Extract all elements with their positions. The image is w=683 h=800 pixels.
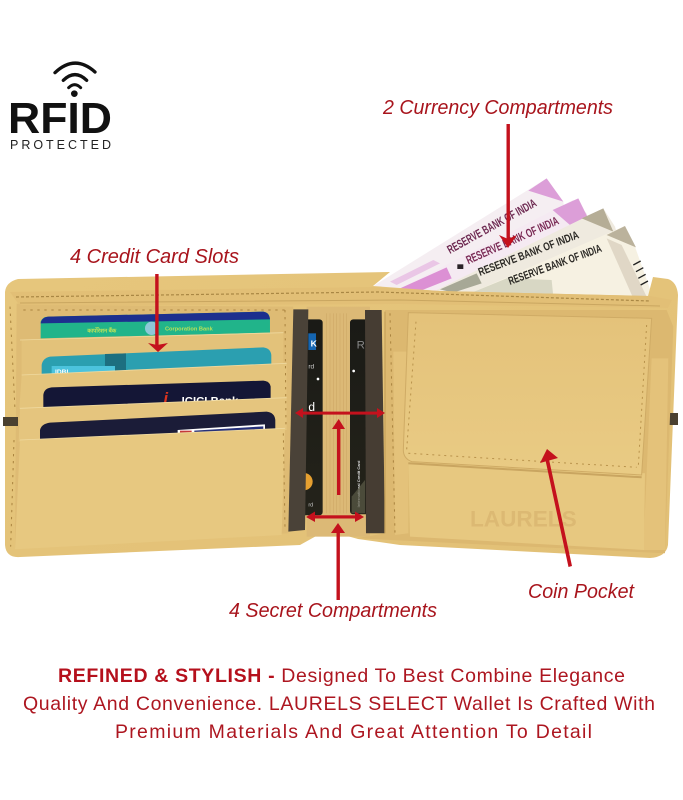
centre spine bbox=[307, 307, 370, 537]
right panel bbox=[357, 310, 673, 553]
side gusset bbox=[393, 352, 408, 535]
stitching bbox=[10, 307, 287, 547]
secret card left: d bbox=[308, 400, 315, 414]
secret card right bbox=[350, 319, 373, 514]
secret card right: International Credit Card bbox=[356, 460, 361, 507]
card 2: teal bank card bbox=[42, 347, 271, 376]
card slot backing bbox=[15, 303, 293, 548]
centre panel bbox=[288, 307, 385, 537]
arrow: currency compartments bbox=[499, 124, 517, 248]
card slot pocket 3 bbox=[19, 398, 287, 442]
arrow: secret compartments upper horizontal bbox=[295, 408, 385, 418]
arrow: secret compartments vertical up bbox=[332, 419, 345, 495]
top binding bbox=[10, 287, 672, 308]
arrow: secret compartments vertical lower bbox=[331, 523, 345, 600]
card 4: dark bank card bbox=[40, 412, 275, 441]
label: Coin Pocket: Coin Pocket bbox=[528, 581, 635, 603]
description text: REFINED & STYLISH - Designed To Best Combine Elegance bbox=[58, 665, 625, 687]
front pocket bbox=[15, 428, 285, 549]
wallet bbox=[3, 272, 678, 558]
right coin pocket bbox=[357, 310, 673, 553]
flap shadow bbox=[408, 463, 642, 477]
description text: Quality And Convenience. LAURELS SELECT Wallet Is Crafted With bbox=[23, 693, 655, 715]
card 2: teal bank card: IDBI bbox=[55, 369, 68, 376]
secret card left: rd bbox=[308, 363, 315, 370]
label: 4 Credit Card Slots: 4 Credit Card Slots bbox=[70, 246, 239, 268]
card 3: ICICI card bbox=[43, 381, 271, 408]
secret card right: R bbox=[357, 339, 365, 351]
right edge shading bbox=[383, 312, 387, 533]
RFID wordmark: RFID bbox=[8, 94, 112, 143]
note: front grey: RESERVE BANK OF INDIA bbox=[507, 243, 603, 288]
arrow: credit card slots bbox=[148, 274, 168, 352]
secret card left: rd bbox=[308, 503, 313, 509]
right dark strip bbox=[365, 310, 385, 533]
currency notes bbox=[373, 178, 653, 303]
note: back grey: RESERVE BANK OF INDIA bbox=[477, 229, 581, 279]
card 3: ICICI card: ICICI Bank bbox=[182, 396, 239, 408]
embossed brand: LAURELS bbox=[470, 507, 577, 532]
note: front pink: RESERVE BANK OF INDIA bbox=[464, 214, 561, 267]
description text bbox=[23, 665, 655, 743]
label: 2 Currency Compartments: 2 Currency Compartments bbox=[382, 97, 613, 119]
arrow: secret compartments lower horizontal bbox=[306, 512, 364, 522]
note: back pink bbox=[373, 178, 580, 303]
coin pocket body bbox=[408, 460, 645, 550]
note: back pink: RESERVE BANK OF INDIA bbox=[445, 196, 539, 257]
protected caption: PROTECTED bbox=[10, 138, 111, 152]
secret card left: K bbox=[311, 339, 318, 349]
secret card left bbox=[295, 319, 323, 515]
icon: wireless signal bbox=[55, 63, 95, 97]
description text: Premium Materials And Great Attention To Detail bbox=[115, 721, 592, 743]
coin pocket flap bbox=[403, 313, 652, 475]
left dark strip bbox=[288, 309, 308, 532]
note: back grey bbox=[437, 208, 637, 303]
left card panel bbox=[10, 303, 293, 549]
card slot pocket 1 bbox=[22, 333, 283, 375]
flap stitching bbox=[407, 322, 647, 467]
card 1: Corporation Bank: Corporation Bank bbox=[165, 327, 214, 333]
note: front pink bbox=[400, 198, 607, 303]
card slot pocket 2 bbox=[19, 363, 287, 409]
card 1: Corporation Bank: कार्पोरेशन बैंक bbox=[86, 326, 117, 334]
wallet body bbox=[5, 272, 678, 558]
RFID protected logo bbox=[8, 63, 112, 152]
card 3: ICICI card: i bbox=[163, 389, 168, 408]
side strap marks bbox=[3, 413, 678, 426]
arrow: coin pocket bbox=[540, 449, 572, 567]
card 1: Corporation Bank bbox=[41, 312, 270, 338]
note: front grey bbox=[470, 226, 653, 303]
label: 4 Secret Compartments: 4 Secret Compartments bbox=[229, 600, 437, 622]
